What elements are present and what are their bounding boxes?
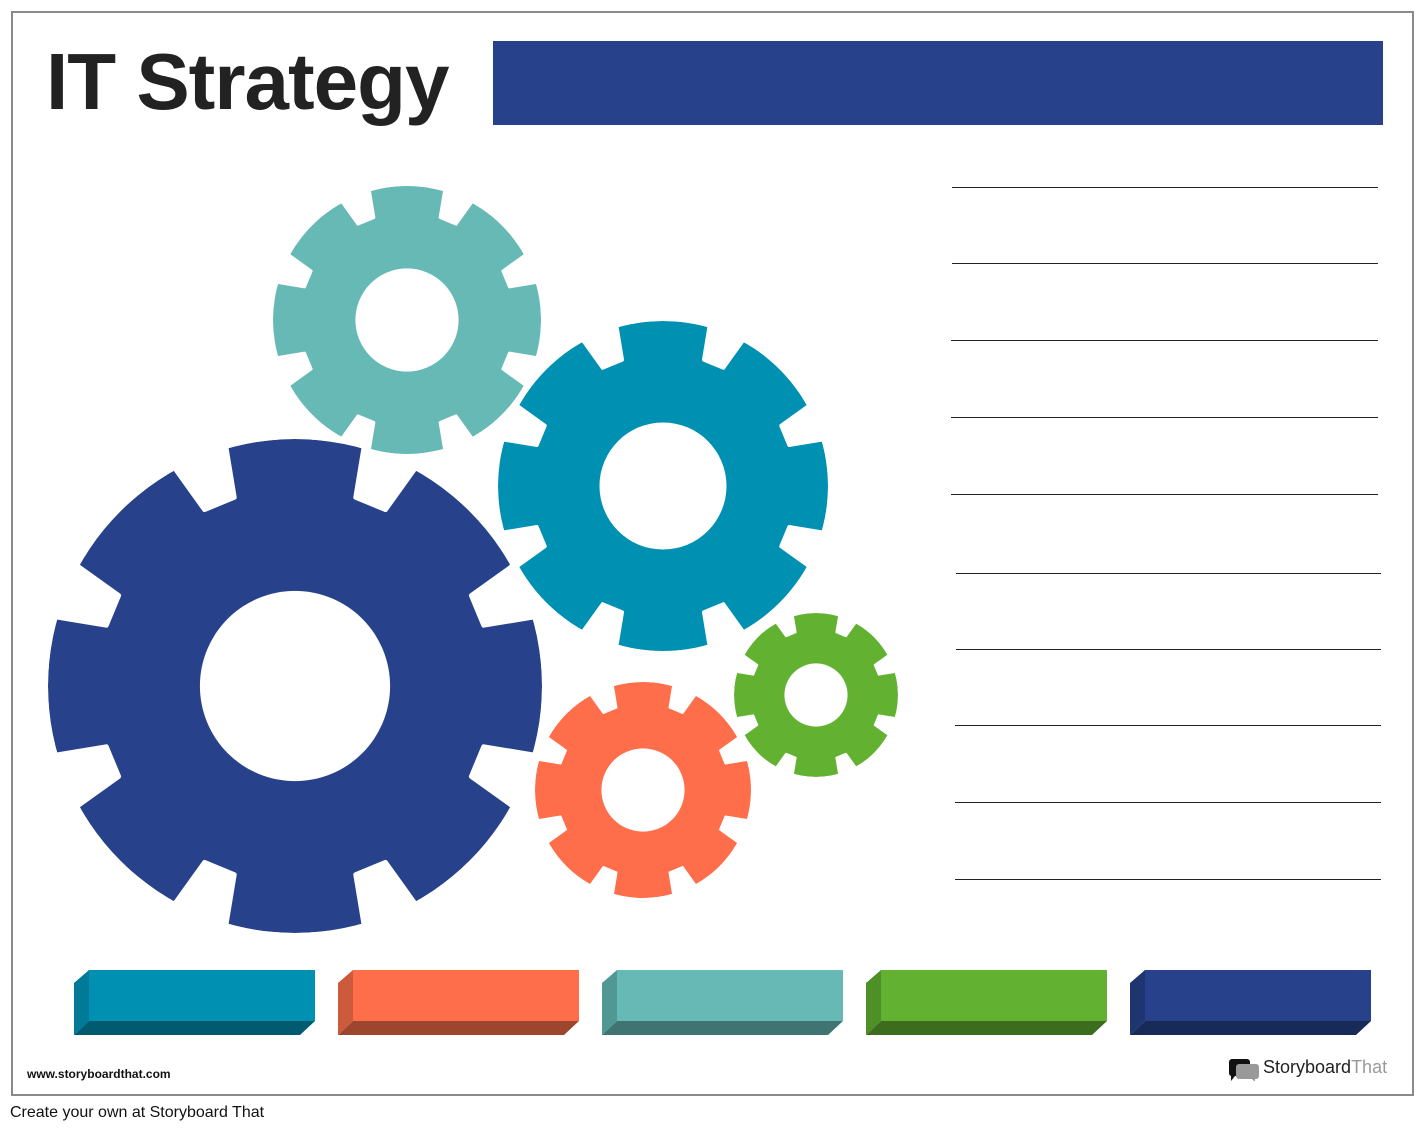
logo: StoryboardThat	[1263, 1057, 1387, 1077]
box: green	[866, 970, 1107, 1035]
box: light teal	[602, 970, 843, 1035]
3D label boxes	[74, 970, 1371, 1035]
writing lines	[951, 187, 1381, 880]
caption: Create your own at Storyboard That	[10, 1104, 264, 1121]
title: IT Strategy	[46, 37, 448, 126]
footer url: www.storyboardthat.com	[27, 1067, 171, 1081]
box: blue	[74, 970, 315, 1035]
gear: navy large	[48, 439, 542, 933]
box: navy	[1130, 970, 1371, 1035]
gear: green	[734, 613, 898, 777]
gears illustration	[48, 186, 898, 933]
title bar	[493, 41, 1383, 125]
gear: blue	[498, 321, 828, 651]
gear: orange	[535, 682, 751, 898]
gear: light teal	[273, 186, 541, 454]
box: orange	[338, 970, 579, 1035]
logo	[1229, 1057, 1387, 1081]
